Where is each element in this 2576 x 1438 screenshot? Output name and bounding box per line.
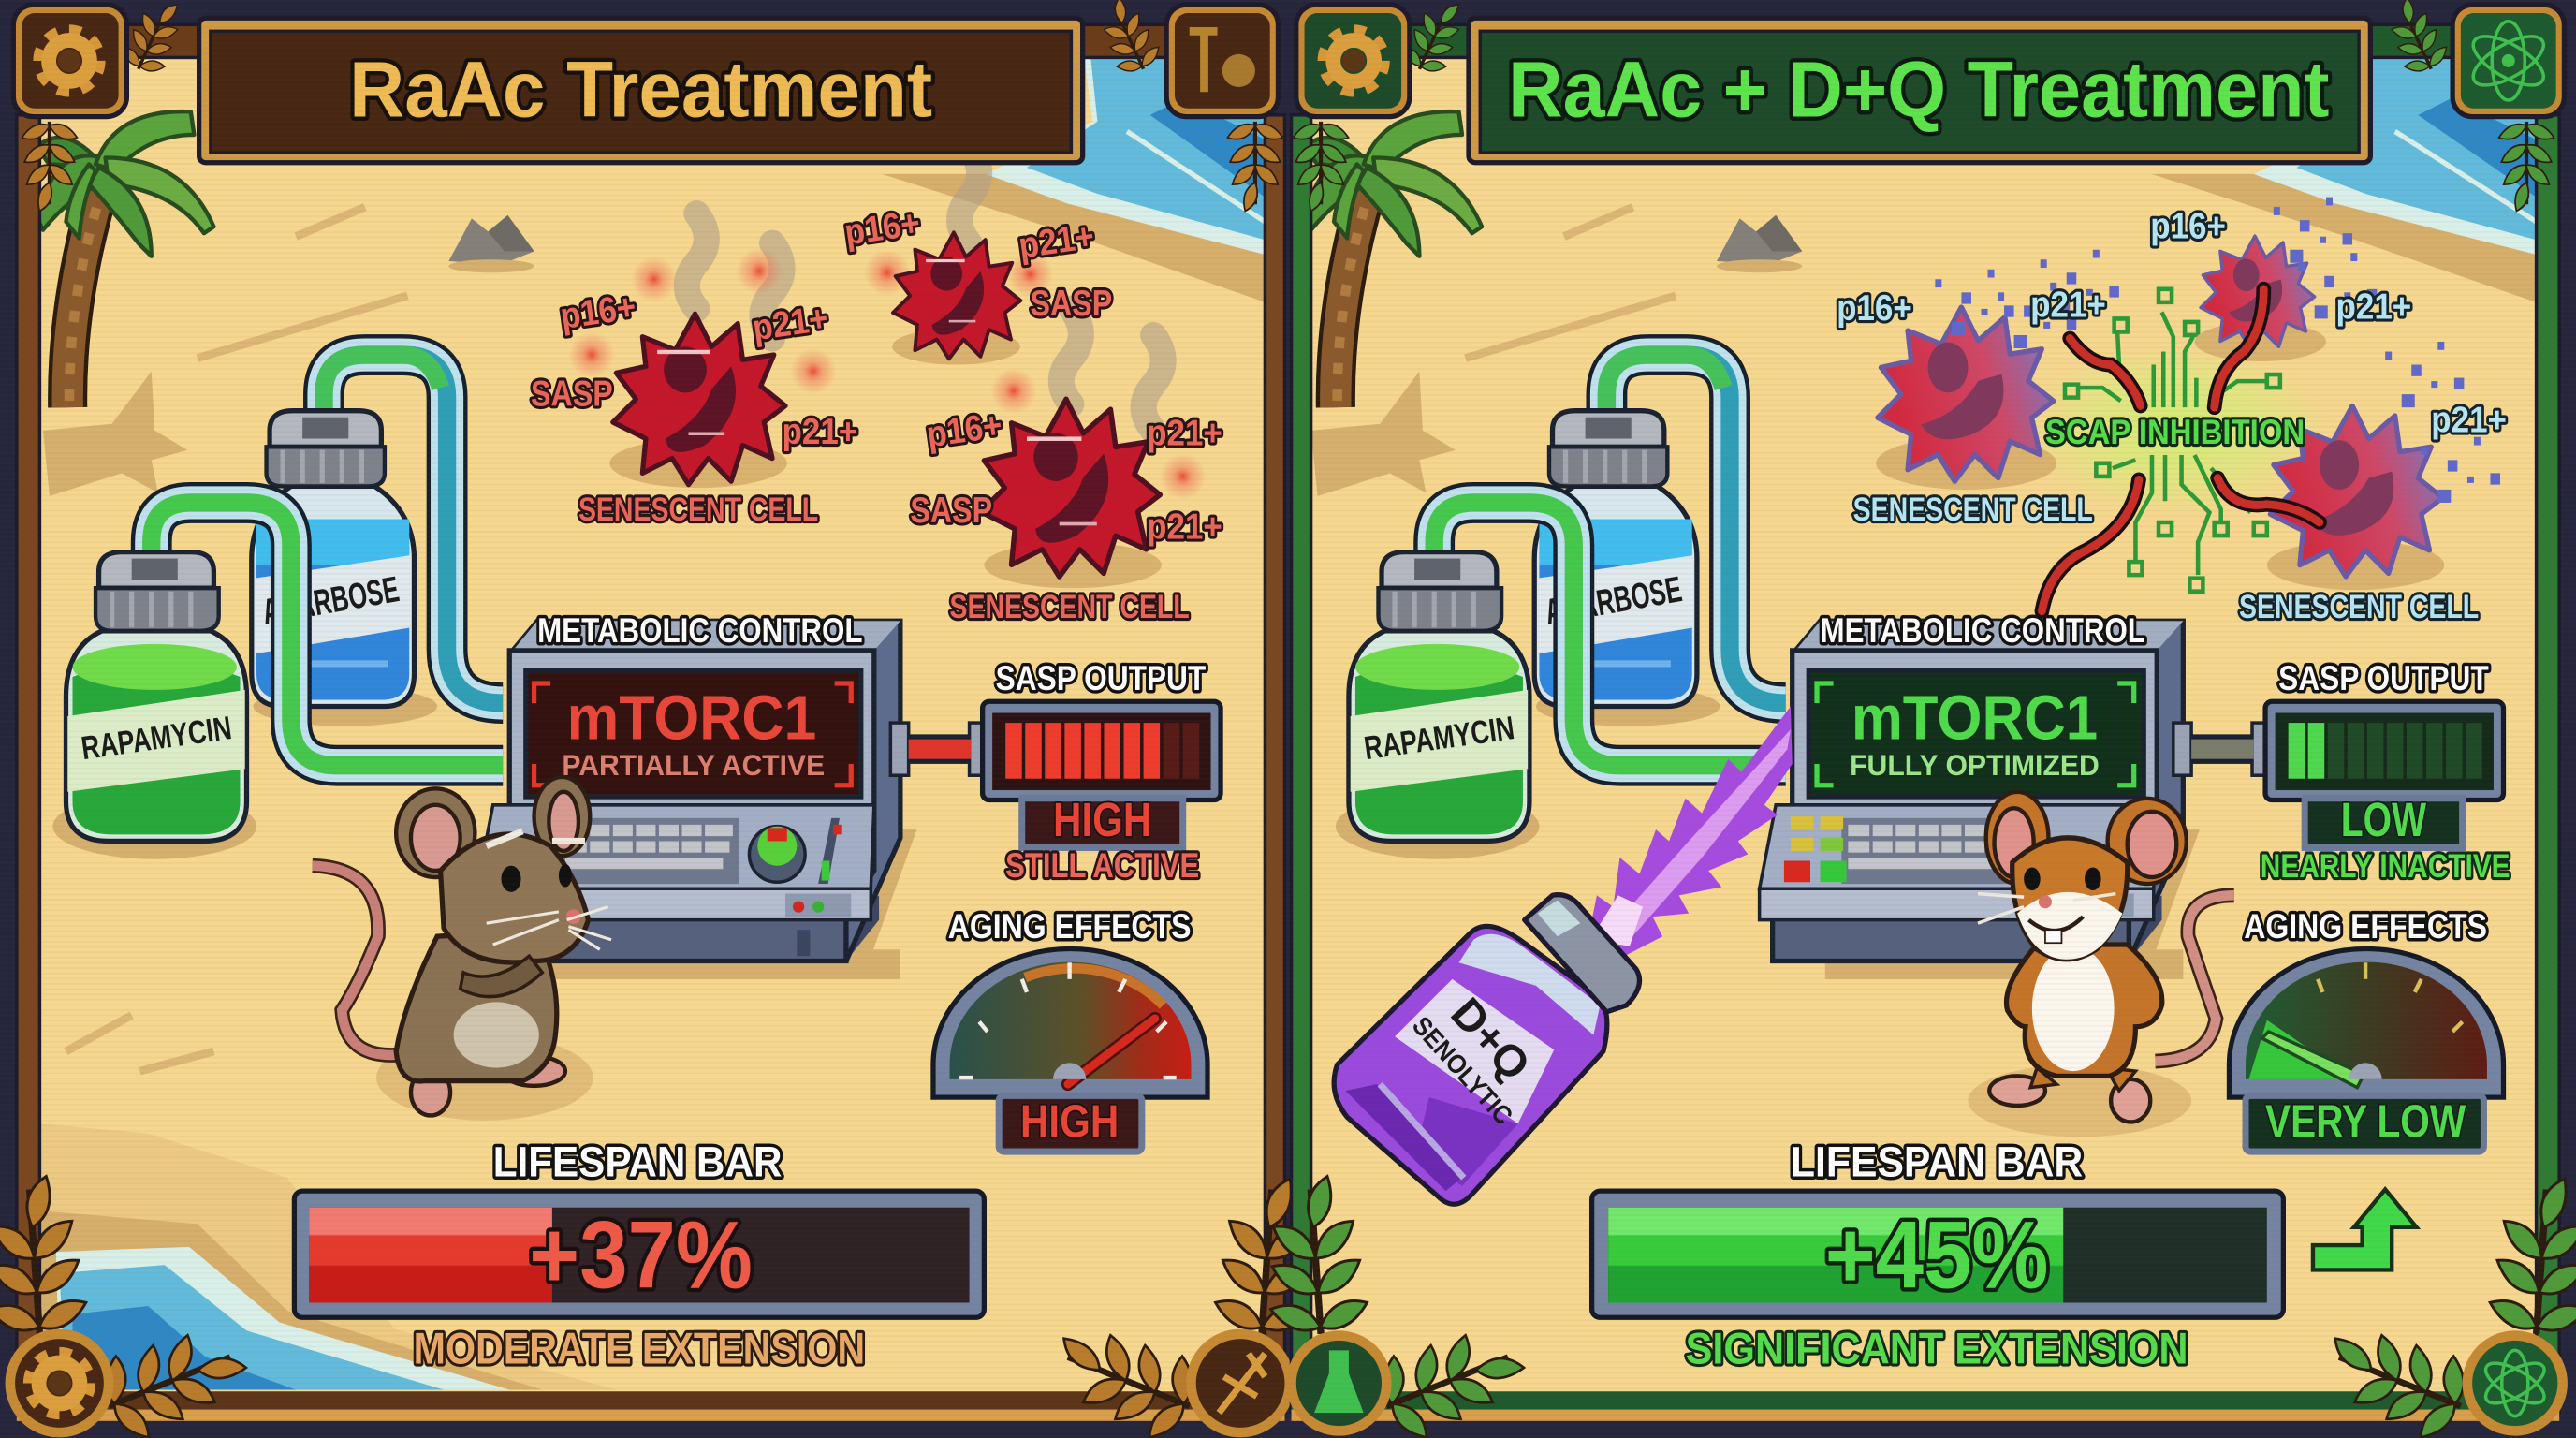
bar fill (309, 1208, 552, 1302)
cell shadows (609, 329, 1162, 588)
palm tree (37, 111, 213, 407)
vial glass shoulder (1458, 934, 1600, 1034)
cell marker labels: p16+ (1837, 288, 1912, 329)
vial cap highlight (1538, 901, 1580, 936)
rat head (441, 834, 588, 962)
rapamycin pipe and bottle (52, 503, 503, 859)
acarbose label: ACARBOSE (259, 569, 402, 633)
beach sand (30, 30, 1271, 1410)
bar fill (1608, 1208, 2063, 1302)
screen corner brackets (1817, 683, 2134, 785)
rat head (2012, 838, 2128, 960)
corner badge top right atom (2452, 5, 2564, 117)
vial text senolytic: SENOLYTIC (1407, 1011, 1518, 1130)
laurel sprigs green (1259, 0, 2576, 1438)
cell marker labels: SASP (1031, 284, 1112, 324)
SASP output meter (890, 659, 1221, 885)
monitor screen (1808, 670, 2144, 797)
circuit traces (2076, 312, 2265, 575)
title plate (199, 18, 1083, 163)
lifespan value: +45% (1825, 1202, 2048, 1309)
acarbose pipe and bottle (1534, 355, 1786, 726)
rapamycin pipe and bottle (1336, 503, 1786, 859)
palm tree shadow (43, 372, 187, 496)
gauge value: VERY LOW (2265, 1096, 2466, 1147)
rat crossed arms (461, 956, 542, 997)
fading cell 3 (2270, 405, 2443, 577)
corner badge bottom left gear (10, 1334, 109, 1432)
cell marker labels: p21+ (2030, 286, 2106, 326)
meter bars (1005, 723, 1199, 779)
corner badge bottom left flask (1292, 1336, 1386, 1431)
bar case (294, 1191, 984, 1317)
still active note: STILL ACTIVE (1005, 846, 1199, 885)
SASP label: SASP OUTPUT (996, 659, 1207, 697)
gauge label: AGING EFFECTS (2244, 907, 2487, 946)
rat tail (2155, 895, 2234, 1062)
right rail (1265, 115, 1284, 1413)
LOW plate (2305, 799, 2463, 847)
rat feet (1989, 1076, 2150, 1122)
cell marker labels: p21+ (1147, 507, 1222, 548)
rat ears (396, 777, 590, 877)
meter case (2265, 701, 2503, 800)
rat shadow (1968, 1064, 2191, 1137)
palm tree shadow (1311, 372, 1456, 496)
D+Q senolytic vial (1334, 895, 1640, 1204)
cell shadows (1876, 322, 2444, 590)
gauge label: AGING EFFECTS (948, 907, 1191, 946)
green frame (1292, 24, 2559, 1421)
SASP output meter (2174, 659, 2510, 885)
gauge plate (2246, 1095, 2483, 1152)
lifespan label: LIFESPAN BAR (493, 1137, 783, 1185)
cell marker labels: SENESCENT CELL (1853, 492, 2093, 528)
red severed cables (2042, 289, 2320, 611)
cell marker labels: p16+ (924, 405, 1004, 455)
rock (1717, 215, 1802, 272)
cell marker labels: p16+ (2150, 206, 2226, 246)
gauge hub (2349, 1063, 2382, 1079)
monitor screen (526, 670, 861, 797)
cell marker labels: SASP (910, 491, 992, 531)
cell marker labels (1837, 206, 2507, 625)
vial label (1395, 979, 1554, 1123)
rat belly (2032, 946, 2115, 1071)
vial lower dark liquid (1416, 1097, 1518, 1186)
rat belly (454, 1002, 539, 1068)
vial base rim (1380, 1084, 1464, 1178)
palm tree (1305, 111, 1482, 407)
up arrow (2313, 1189, 2416, 1269)
gauge needle (2262, 1032, 2364, 1088)
sand ripples (1466, 207, 1676, 359)
machine title: METABOLIC CONTROL (1821, 611, 2145, 650)
status lights (793, 901, 824, 913)
lifespan label: LIFESPAN BAR (1791, 1137, 2083, 1185)
cell marker labels: SENESCENT CELL (578, 492, 818, 528)
rapamycin label: RAPAMYCIN (1362, 710, 1516, 767)
lifespan value: +37% (529, 1202, 753, 1309)
red link (909, 740, 971, 759)
senescent cell cluster (1837, 198, 2507, 625)
gauge needle (1068, 1019, 1155, 1084)
HIGH plate (1022, 799, 1183, 847)
cell marker labels: SENESCENT CELL (950, 589, 1190, 625)
title text: RaAc + D+Q Treatment (1508, 46, 2329, 134)
ocean top right (883, 59, 1265, 302)
vial text D+Q: D+Q (1441, 989, 1540, 1091)
coloured buttons (1784, 816, 1847, 882)
panel: RaAc treatment (0, 0, 1324, 1438)
gauge ticks (2318, 962, 2463, 1032)
circuit pads (2065, 289, 2280, 592)
corner badge bottom right rod (1191, 1334, 1290, 1432)
smoke plumes (687, 148, 1164, 431)
laurel sprigs brown (0, 0, 1324, 1438)
rat shadow (376, 1034, 593, 1121)
purple senolytic spray (1587, 707, 1793, 960)
grey link (2191, 740, 2254, 759)
rat face (1978, 867, 2122, 960)
cell marker labels: p21+ (1017, 216, 1097, 267)
senescent cell 3 (981, 399, 1160, 577)
slider (818, 818, 842, 884)
senescent cell 2 (893, 232, 1020, 359)
rat face (487, 831, 611, 949)
SASP label: SASP OUTPUT (2278, 659, 2489, 697)
gauge dial (933, 948, 1208, 1097)
bottom beam (1292, 1391, 2559, 1410)
bar case (1592, 1191, 2283, 1317)
SCAP inhibition burst (2026, 289, 2328, 592)
corner badge top left gear (13, 5, 126, 117)
fading cell 1 (1878, 307, 2054, 481)
metabolic control machine (476, 611, 916, 979)
corner badge top left gear (1296, 5, 1410, 117)
rat body (2006, 945, 2162, 1076)
cell marker labels: SENESCENT CELL (2239, 589, 2479, 625)
aging effects gauge (2229, 907, 2503, 1152)
rat tail (313, 866, 401, 1055)
vial cap (1525, 895, 1640, 1012)
outcome caption: SIGNIFICANT EXTENSION (1686, 1324, 2188, 1373)
LOW value: LOW (2341, 793, 2426, 846)
gauge ticks (959, 962, 1177, 1078)
senescent cell cluster (531, 148, 1222, 625)
panel: RaAc + D+Q treatment (1259, 0, 2576, 1438)
ocean top right (2152, 59, 2537, 302)
cell marker labels: p16+ (558, 286, 638, 337)
happy rat (1968, 792, 2234, 1137)
meter case (983, 701, 1221, 800)
machine title: METABOLIC CONTROL (537, 611, 863, 650)
rapamycin label: RAPAMYCIN (79, 710, 234, 767)
cell marker labels: SASP (531, 374, 613, 414)
senescent cell 1 (613, 314, 785, 485)
wooden frame (17, 24, 1284, 1421)
acarbose label: ACARBOSE (1542, 569, 1685, 633)
acarbose pipe and bottle (252, 355, 503, 726)
cell marker labels: p21+ (750, 299, 830, 348)
metabolic control machine: PARTIALLY ACTIVE (562, 748, 825, 782)
cell marker labels: p21+ (783, 412, 857, 452)
vial base (1345, 1084, 1464, 1191)
rat feet (411, 1056, 565, 1115)
cell marker labels (531, 203, 1222, 625)
top beam (115, 24, 1183, 57)
cell marker labels: p21+ (2431, 400, 2507, 440)
grumpy rat (313, 777, 611, 1121)
dissolving particles (1935, 198, 2500, 503)
nearly inactive note: NEARLY INACTIVE (2261, 848, 2510, 885)
lifespan bar (1592, 1137, 2283, 1373)
inhibition glow (2026, 345, 2328, 516)
beach sand (1308, 30, 2543, 1410)
rat ears (1986, 792, 2187, 884)
gauge hub (1053, 1063, 1086, 1079)
corner badge top right flask (1166, 5, 1278, 117)
outcome caption: MODERATE EXTENSION (414, 1324, 865, 1373)
right rail (2537, 115, 2559, 1413)
rat body (396, 930, 557, 1081)
mTORC1 status text: mTORC1 (1852, 684, 2098, 754)
lifespan bar (294, 1137, 984, 1373)
HIGH value: HIGH (1053, 793, 1151, 846)
gauge dial (2229, 948, 2503, 1097)
top beam (1397, 24, 2464, 57)
green zone (2249, 1020, 2354, 1079)
left rail (17, 115, 39, 1413)
knob (749, 827, 805, 882)
rock (448, 215, 534, 272)
bottom beam (17, 1391, 1284, 1410)
rat legs (2030, 1068, 2135, 1091)
sand ripples (66, 207, 407, 1071)
senescence glow particles (568, 248, 1206, 499)
cell marker labels: p21+ (1147, 414, 1222, 454)
fading cell 2 (2201, 236, 2315, 349)
vial body (1334, 926, 1607, 1204)
cell marker labels: p21+ (2336, 286, 2411, 327)
ocean bottom left (39, 1123, 616, 1389)
gauge value: HIGH (1020, 1096, 1119, 1147)
mTORC1 status text: mTORC1 (567, 684, 816, 754)
title text: RaAc Treatment (349, 46, 932, 134)
left rail (1292, 115, 1311, 1413)
meter bars (2289, 723, 2482, 779)
corner badge bottom right atom (2467, 1336, 2563, 1431)
SCAP inhibition label: SCAP INHIBITION (2045, 413, 2305, 451)
metabolic control machine (1760, 611, 2200, 979)
title plate (1469, 18, 2370, 163)
gauge plate (999, 1095, 1142, 1152)
aging effects gauge (933, 907, 1208, 1152)
metabolic control machine: FULLY OPTIMIZED (1850, 748, 2100, 782)
cell marker labels: p16+ (842, 203, 923, 254)
screen corner brackets (534, 683, 851, 785)
